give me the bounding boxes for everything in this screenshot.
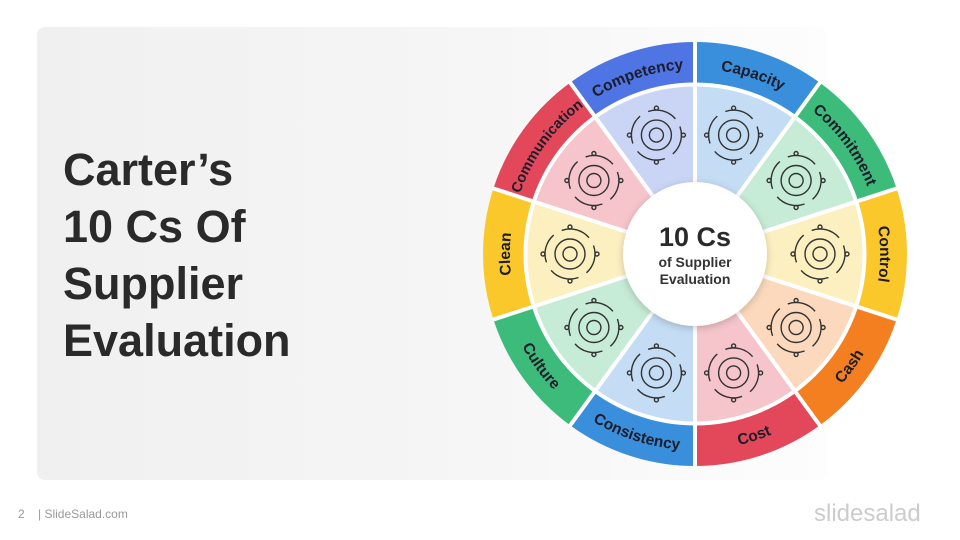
footer page info: 2 | SlideSalad.com — [18, 507, 128, 521]
icons — [538, 103, 852, 405]
segment labels: Consistency — [594, 414, 680, 452]
center circle: Evaluation — [660, 271, 730, 287]
segment labels: Capacity — [722, 61, 786, 91]
title: Carter’s — [63, 144, 233, 195]
segment labels: Commitment — [814, 104, 876, 186]
segment labels — [498, 61, 890, 452]
title: Evaluation — [63, 315, 291, 366]
title — [63, 144, 291, 366]
segment labels: Cash — [836, 350, 864, 382]
inner light segments — [527, 86, 863, 422]
title: 10 Cs Of — [63, 201, 246, 252]
center circle: of Supplier — [658, 254, 732, 270]
segment labels: Clean — [498, 233, 511, 275]
segment labels: Communication — [512, 102, 583, 192]
segment labels: Competency — [592, 61, 683, 96]
outer ring segments — [483, 42, 907, 466]
segment labels: Culture — [524, 343, 558, 388]
center circle — [623, 182, 767, 326]
segment labels: Control — [878, 226, 890, 282]
footer logo: slidesalad — [814, 500, 921, 527]
title: Supplier — [63, 258, 243, 309]
segment labels: Cost — [738, 426, 772, 444]
background panel — [37, 27, 827, 480]
center circle: 10 Cs — [659, 222, 731, 252]
